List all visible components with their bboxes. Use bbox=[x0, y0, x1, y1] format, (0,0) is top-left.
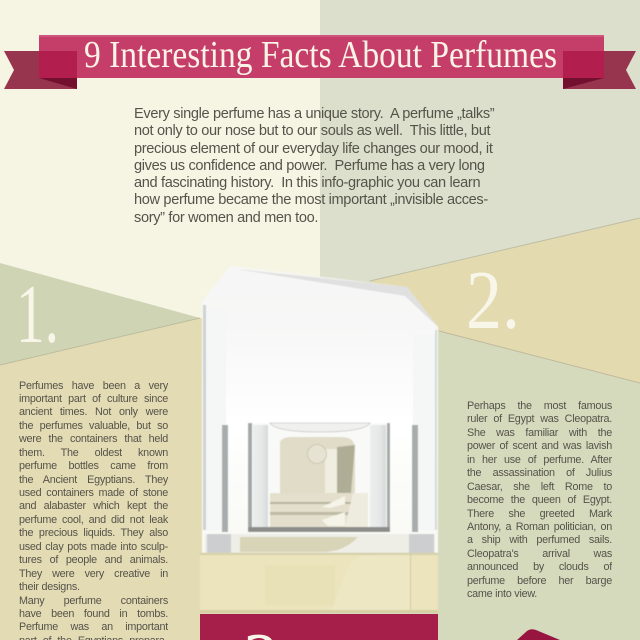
numeral 2: 2. bbox=[466, 254, 520, 347]
fact 1 text: ancient times. Not only were bbox=[19, 406, 168, 418]
fact 1 text: Perfume was an important bbox=[19, 621, 168, 633]
fact 2 text: become the queen of Egypt. bbox=[467, 494, 612, 506]
fact 2 text: Caesar, she left Rome to bbox=[467, 481, 612, 493]
numeral 1: 1. bbox=[16, 268, 59, 361]
fact 1 text: perfume bottles came from bbox=[19, 460, 168, 472]
fact 1 text: tures of people and animals. bbox=[19, 554, 168, 566]
fact 2 text: power of scent and was lavish bbox=[467, 440, 612, 452]
fact 1 text: used clay pots made into sculp- bbox=[19, 541, 168, 553]
intro paragraph: sory” for women and men too. bbox=[134, 210, 318, 226]
fact 2 text: There she greeted Mark bbox=[467, 508, 612, 520]
fact 1 text: the precious liquids. They also bbox=[19, 527, 168, 539]
fact 2 text: Cleopatra's arrival was bbox=[467, 548, 612, 560]
fact 2 text: Antony, a Roman politician, on bbox=[467, 521, 612, 533]
fact 1 text: and alabaster which kept the bbox=[19, 500, 168, 512]
intro paragraph: not only to our nose but to our souls as well. This little, but bbox=[134, 123, 490, 139]
intro paragraph: and fascinating history. In this info-graphic you can learn bbox=[134, 175, 480, 191]
fact 2 text: She was familiar with the bbox=[467, 427, 612, 439]
fact 1 text: They were very creative in bbox=[19, 568, 168, 580]
fact 1 text: their designs. bbox=[19, 581, 80, 593]
fact 1 text: the Ancient Egyptians. They bbox=[19, 474, 168, 486]
intro paragraph bbox=[134, 106, 494, 226]
bottle body bbox=[200, 614, 438, 640]
fact 2 text: in her use of perfume. After bbox=[467, 454, 612, 466]
fact 2 text: came into view. bbox=[467, 588, 537, 600]
fact 2 text: Perhaps the most famous bbox=[467, 400, 612, 412]
fact 2 text: ruler of Egypt was Cleopatra. bbox=[467, 413, 612, 425]
fact 2 text: announced by clouds of bbox=[467, 561, 612, 573]
fact 2 text: the assassination of Julius bbox=[467, 467, 612, 479]
cap bbox=[202, 266, 438, 553]
fact 1 text bbox=[19, 380, 168, 640]
title: 9 Interesting Facts About Perfumes bbox=[84, 34, 557, 76]
title ribbon bbox=[4, 34, 636, 89]
fact 1 text: Many perfume containers bbox=[19, 594, 168, 606]
fact 2 text bbox=[467, 400, 612, 600]
fact 2 text: a ship with perfumed sails. bbox=[467, 534, 612, 546]
fact 1 text: used containers made of stone bbox=[19, 487, 168, 499]
fact 1 text: important part of culture since bbox=[19, 393, 168, 405]
intro paragraph: gives us confidence and power. Perfume has a very long bbox=[134, 158, 485, 174]
fact 2 text: perfume before her barge bbox=[467, 575, 612, 587]
fact 1 text: them. The oldest known bbox=[19, 447, 168, 459]
intro paragraph: precious element of our everyday life changes our mood, it bbox=[134, 141, 493, 157]
fact 1 text: the perfumes valuable, but so bbox=[19, 420, 168, 432]
collar band bbox=[200, 553, 438, 613]
fact 1 text: were the containers that held bbox=[19, 433, 168, 445]
fact 1 text: perfume cool, and did not leak bbox=[19, 514, 168, 526]
intro paragraph: Every single perfume has a unique story. A perfume „talks” bbox=[134, 106, 494, 122]
fact 1 text: Perfumes have been a very bbox=[19, 380, 168, 392]
intro paragraph: how perfume became the most important „invisible acces- bbox=[134, 192, 488, 208]
fact 1 text: have been found in tombs. bbox=[19, 608, 168, 620]
